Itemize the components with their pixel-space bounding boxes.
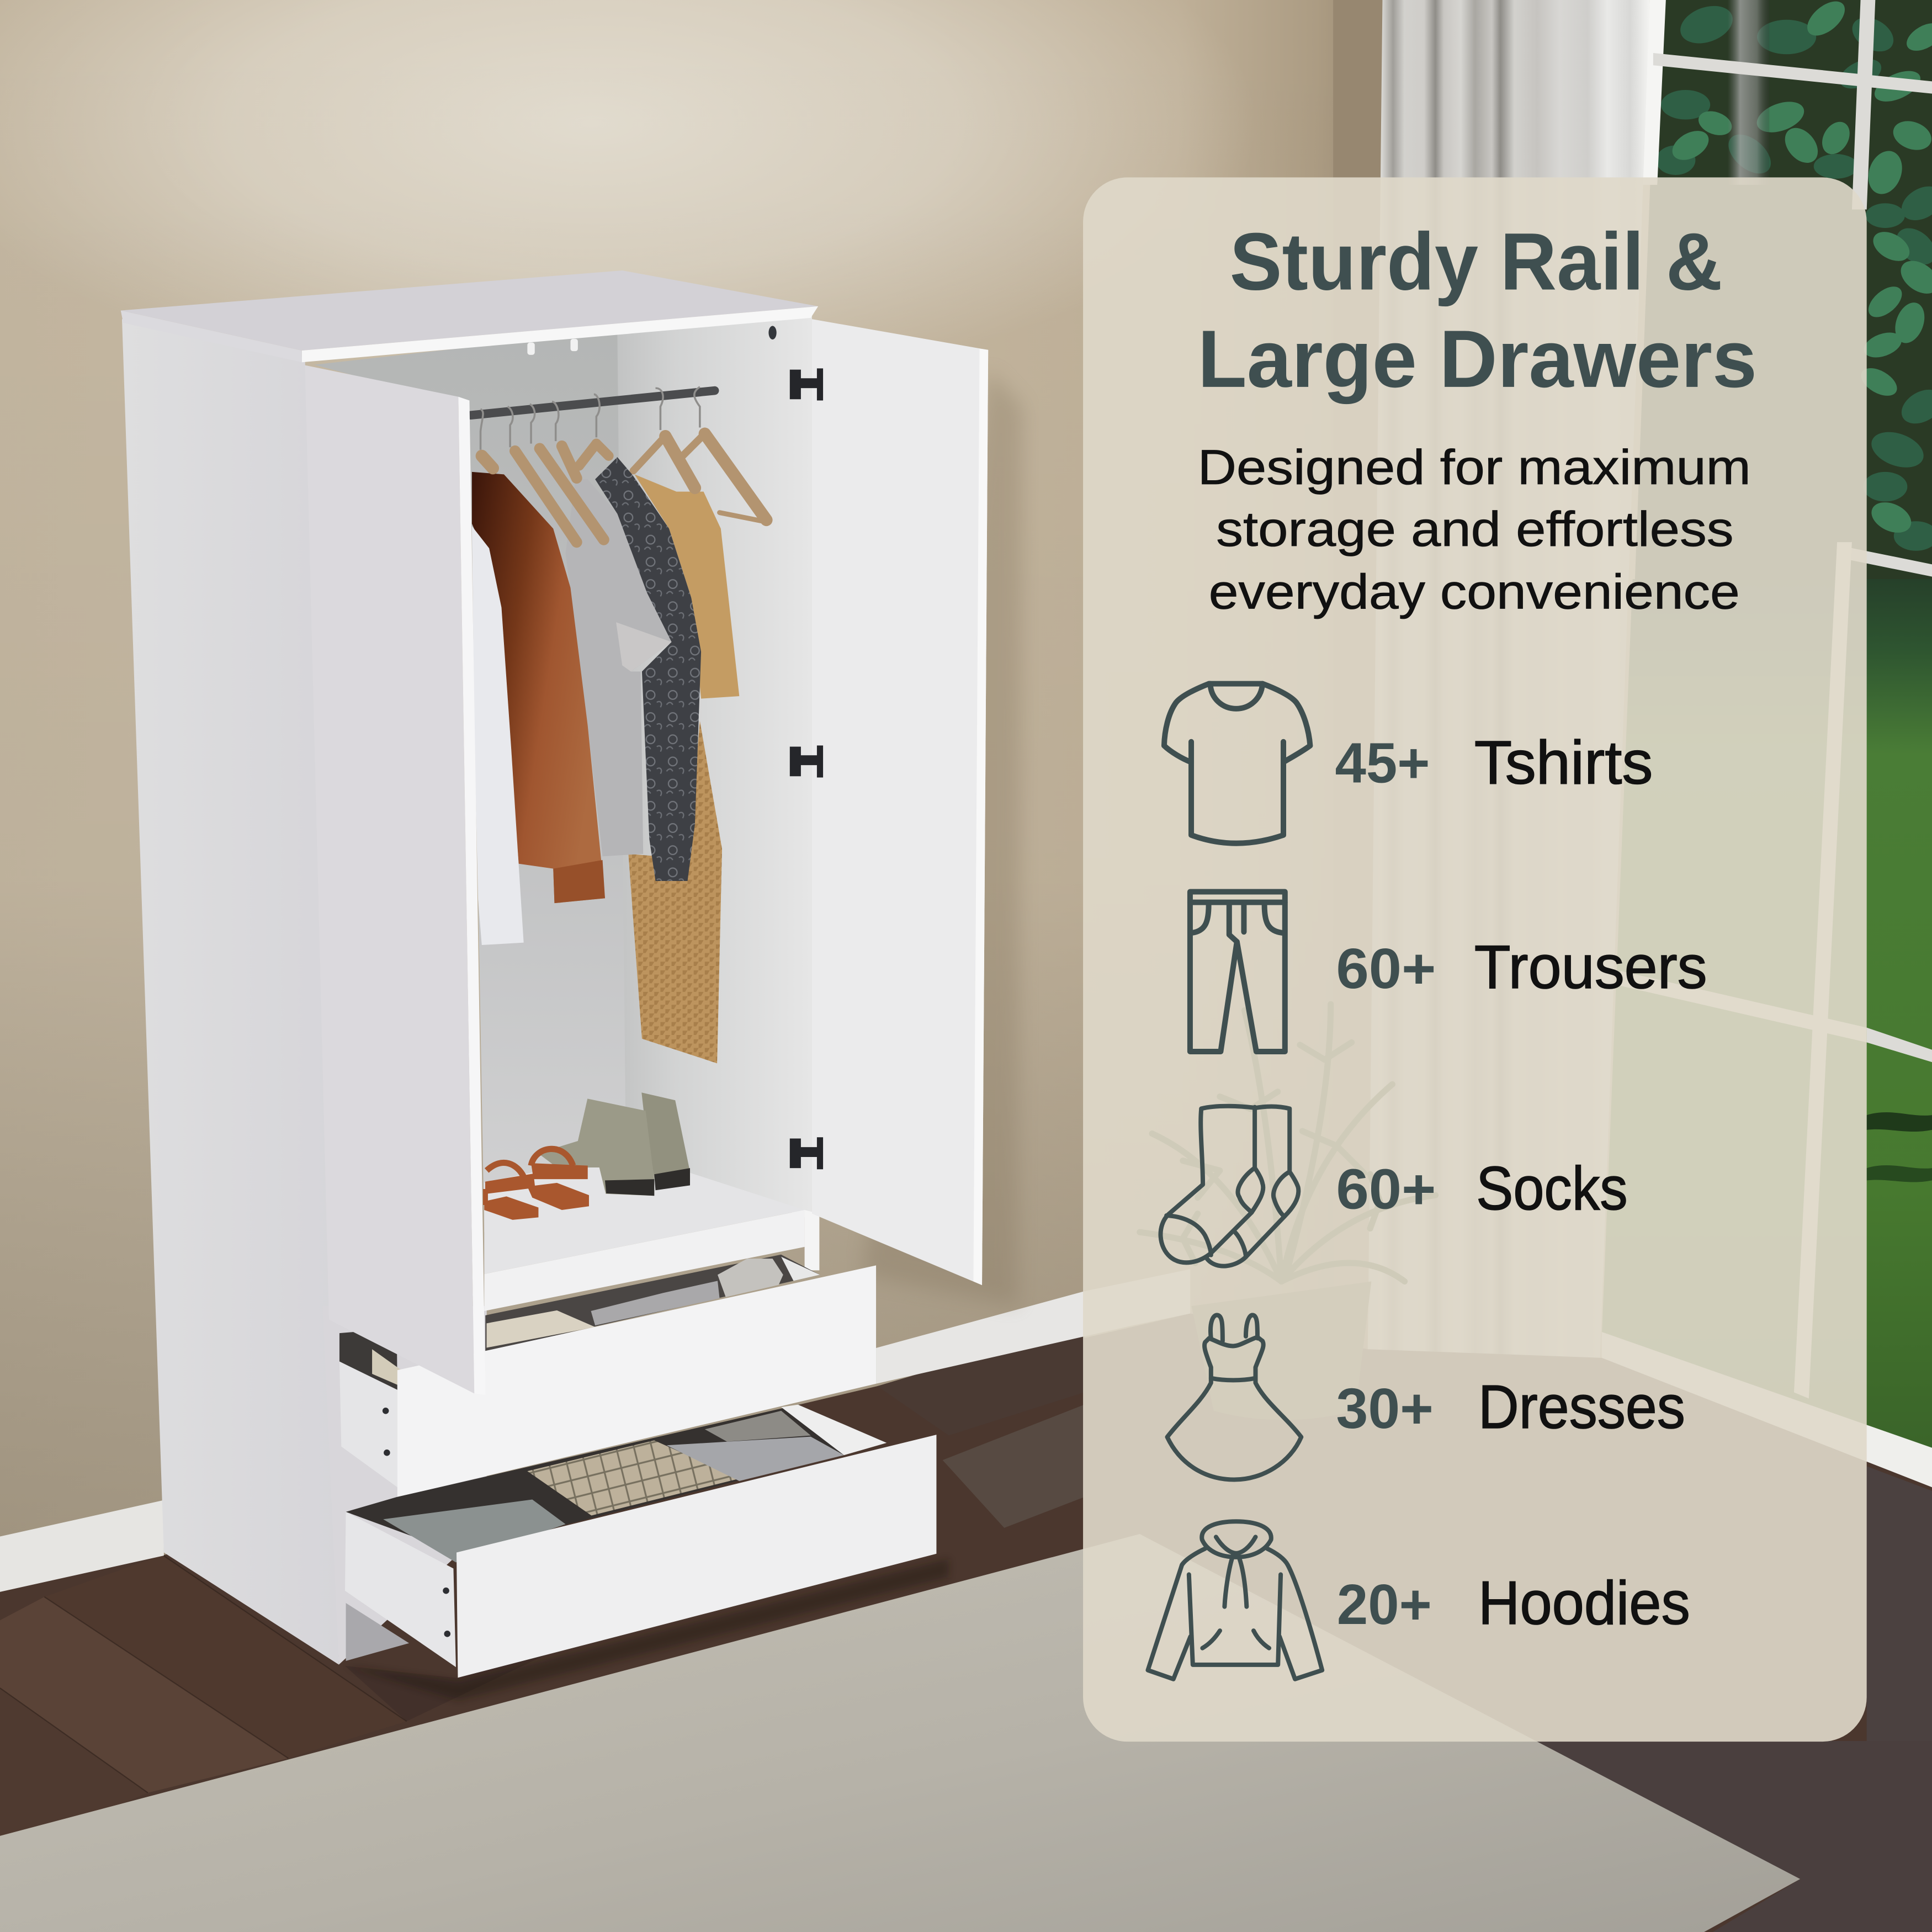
count: 30+: [1336, 1377, 1434, 1440]
side panel: [122, 319, 339, 1665]
subtitle: everyday convenience: [1209, 564, 1740, 619]
info panel: [1083, 177, 1867, 1742]
icon: socks: [1161, 1106, 1298, 1266]
lower shelf with shoes: [484, 1092, 819, 1311]
left door: [305, 365, 485, 1395]
drawer 2: [345, 1405, 936, 1678]
dark floral top: [595, 457, 701, 881]
label: Tshirts: [1474, 728, 1653, 797]
row: trousers: [1190, 891, 1707, 1052]
label: Hoodies: [1478, 1568, 1690, 1637]
wardrobe: [121, 270, 1023, 1700]
icon: t-shirt: [1164, 684, 1310, 843]
icon: hoodie: [1148, 1521, 1322, 1679]
icon: dress: [1167, 1315, 1301, 1480]
count: 45+: [1335, 731, 1430, 794]
boots: [538, 1092, 690, 1196]
shadow on wall and floor: [345, 370, 1023, 1700]
window frame: [1602, 0, 1932, 1490]
row: tshirts: [1164, 684, 1653, 843]
white shirt: [472, 526, 524, 945]
drawer 1: [339, 1255, 876, 1497]
top surface: [121, 270, 818, 362]
label: Socks: [1476, 1154, 1628, 1223]
rug: [0, 1534, 1800, 1932]
skirting boards: [0, 1269, 1190, 1592]
icon: trousers: [1190, 891, 1285, 1052]
row: dresses: [1167, 1315, 1685, 1480]
floor: [0, 1313, 1932, 1932]
count: 60+: [1336, 1158, 1436, 1221]
subtitle: storage and effortless: [1216, 501, 1734, 556]
interior back wall: [314, 330, 628, 1232]
wooden hangers (front): [482, 446, 604, 542]
door hinges: [790, 368, 823, 1169]
curtain: [1368, 0, 1650, 1375]
screw hole: [768, 326, 777, 339]
cabinet front behind drawers: [323, 1306, 487, 1665]
count: 20+: [1337, 1573, 1432, 1636]
interior right wall: [617, 315, 812, 1220]
heading: [1198, 217, 1757, 405]
count: 60+: [1336, 937, 1436, 1000]
hanger hooks: [481, 387, 700, 450]
row: hoodies: [1148, 1521, 1690, 1679]
label: Trousers: [1474, 932, 1707, 1001]
subtitle: Designed for maximum: [1198, 439, 1751, 495]
label: Dresses: [1478, 1372, 1685, 1441]
row: socks: [1161, 1106, 1628, 1266]
wall: [0, 0, 1386, 1602]
leather jacket: [472, 472, 605, 903]
garden view through window: [1602, 0, 1932, 1454]
plant behind panel: [1140, 1004, 1435, 1420]
heading: Sturdy Rail &: [1230, 217, 1723, 307]
wooden hangers (rear): [579, 434, 769, 522]
hanging rail: [471, 391, 715, 415]
grey tee: [566, 479, 672, 856]
tan dress: [628, 474, 739, 1063]
sandals: [484, 1149, 589, 1220]
heading: Large Drawers: [1198, 314, 1757, 405]
subtitle: [1198, 439, 1751, 619]
right door: [812, 319, 988, 1285]
